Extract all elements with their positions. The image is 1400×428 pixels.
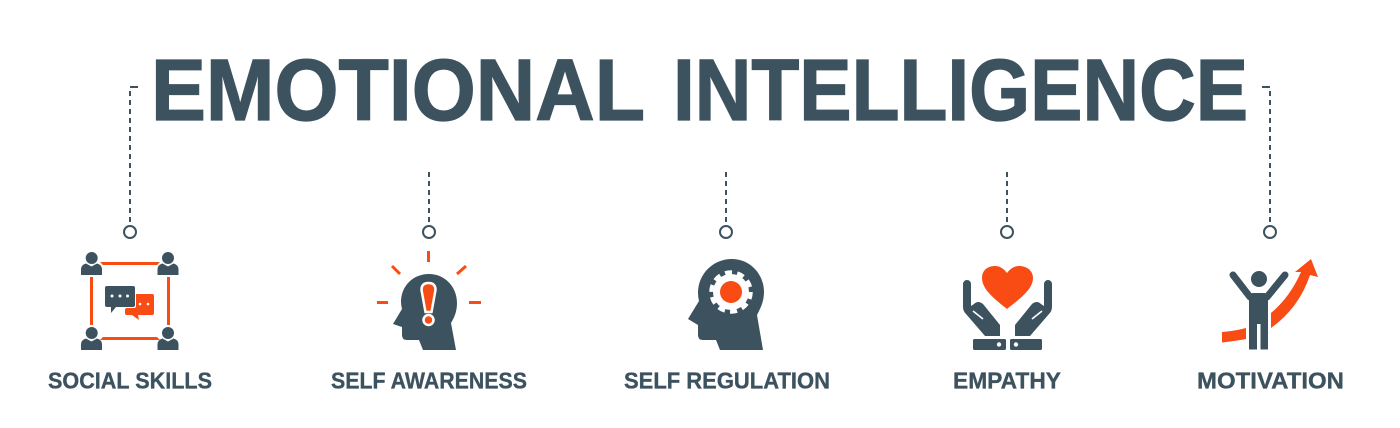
icon: empathy (963, 266, 1052, 350)
heart (982, 266, 1033, 309)
left hand (963, 280, 1000, 336)
orange speech bubble (125, 294, 154, 320)
cuffs (973, 339, 1006, 350)
label: self awareness: SELF AWARENESS (331, 368, 527, 394)
connector: empathy (1001, 172, 1013, 238)
connector: social skills (124, 87, 138, 238)
icon: self awareness (377, 251, 481, 350)
exclamation mark (422, 283, 436, 312)
title: EMOTIONAL (151, 42, 645, 139)
network frame (90, 262, 170, 340)
growth arrow (1222, 328, 1246, 342)
label: motivation: MOTIVATION (1197, 368, 1344, 394)
connector: self regulation (720, 172, 732, 238)
head (393, 274, 457, 350)
connector: self awareness (423, 172, 435, 238)
gear centre (720, 281, 742, 303)
icon: motivation (1222, 259, 1318, 350)
rays (377, 251, 481, 302)
dark speech bubble (105, 286, 135, 313)
label: social skills: SOCIAL SKILLS (48, 368, 212, 394)
label: empathy: EMPATHY (953, 368, 1061, 394)
gear (712, 272, 750, 312)
title: INTELLIGENCE (673, 42, 1248, 139)
label: self regulation: SELF REGULATION (624, 368, 830, 394)
title (151, 42, 1248, 139)
connector: motivation (1262, 87, 1276, 238)
icon: social skills (81, 252, 178, 350)
icon: self regulation (688, 259, 764, 350)
person (1233, 271, 1285, 350)
head (688, 259, 764, 350)
right hand (1015, 280, 1052, 336)
people (81, 252, 178, 350)
